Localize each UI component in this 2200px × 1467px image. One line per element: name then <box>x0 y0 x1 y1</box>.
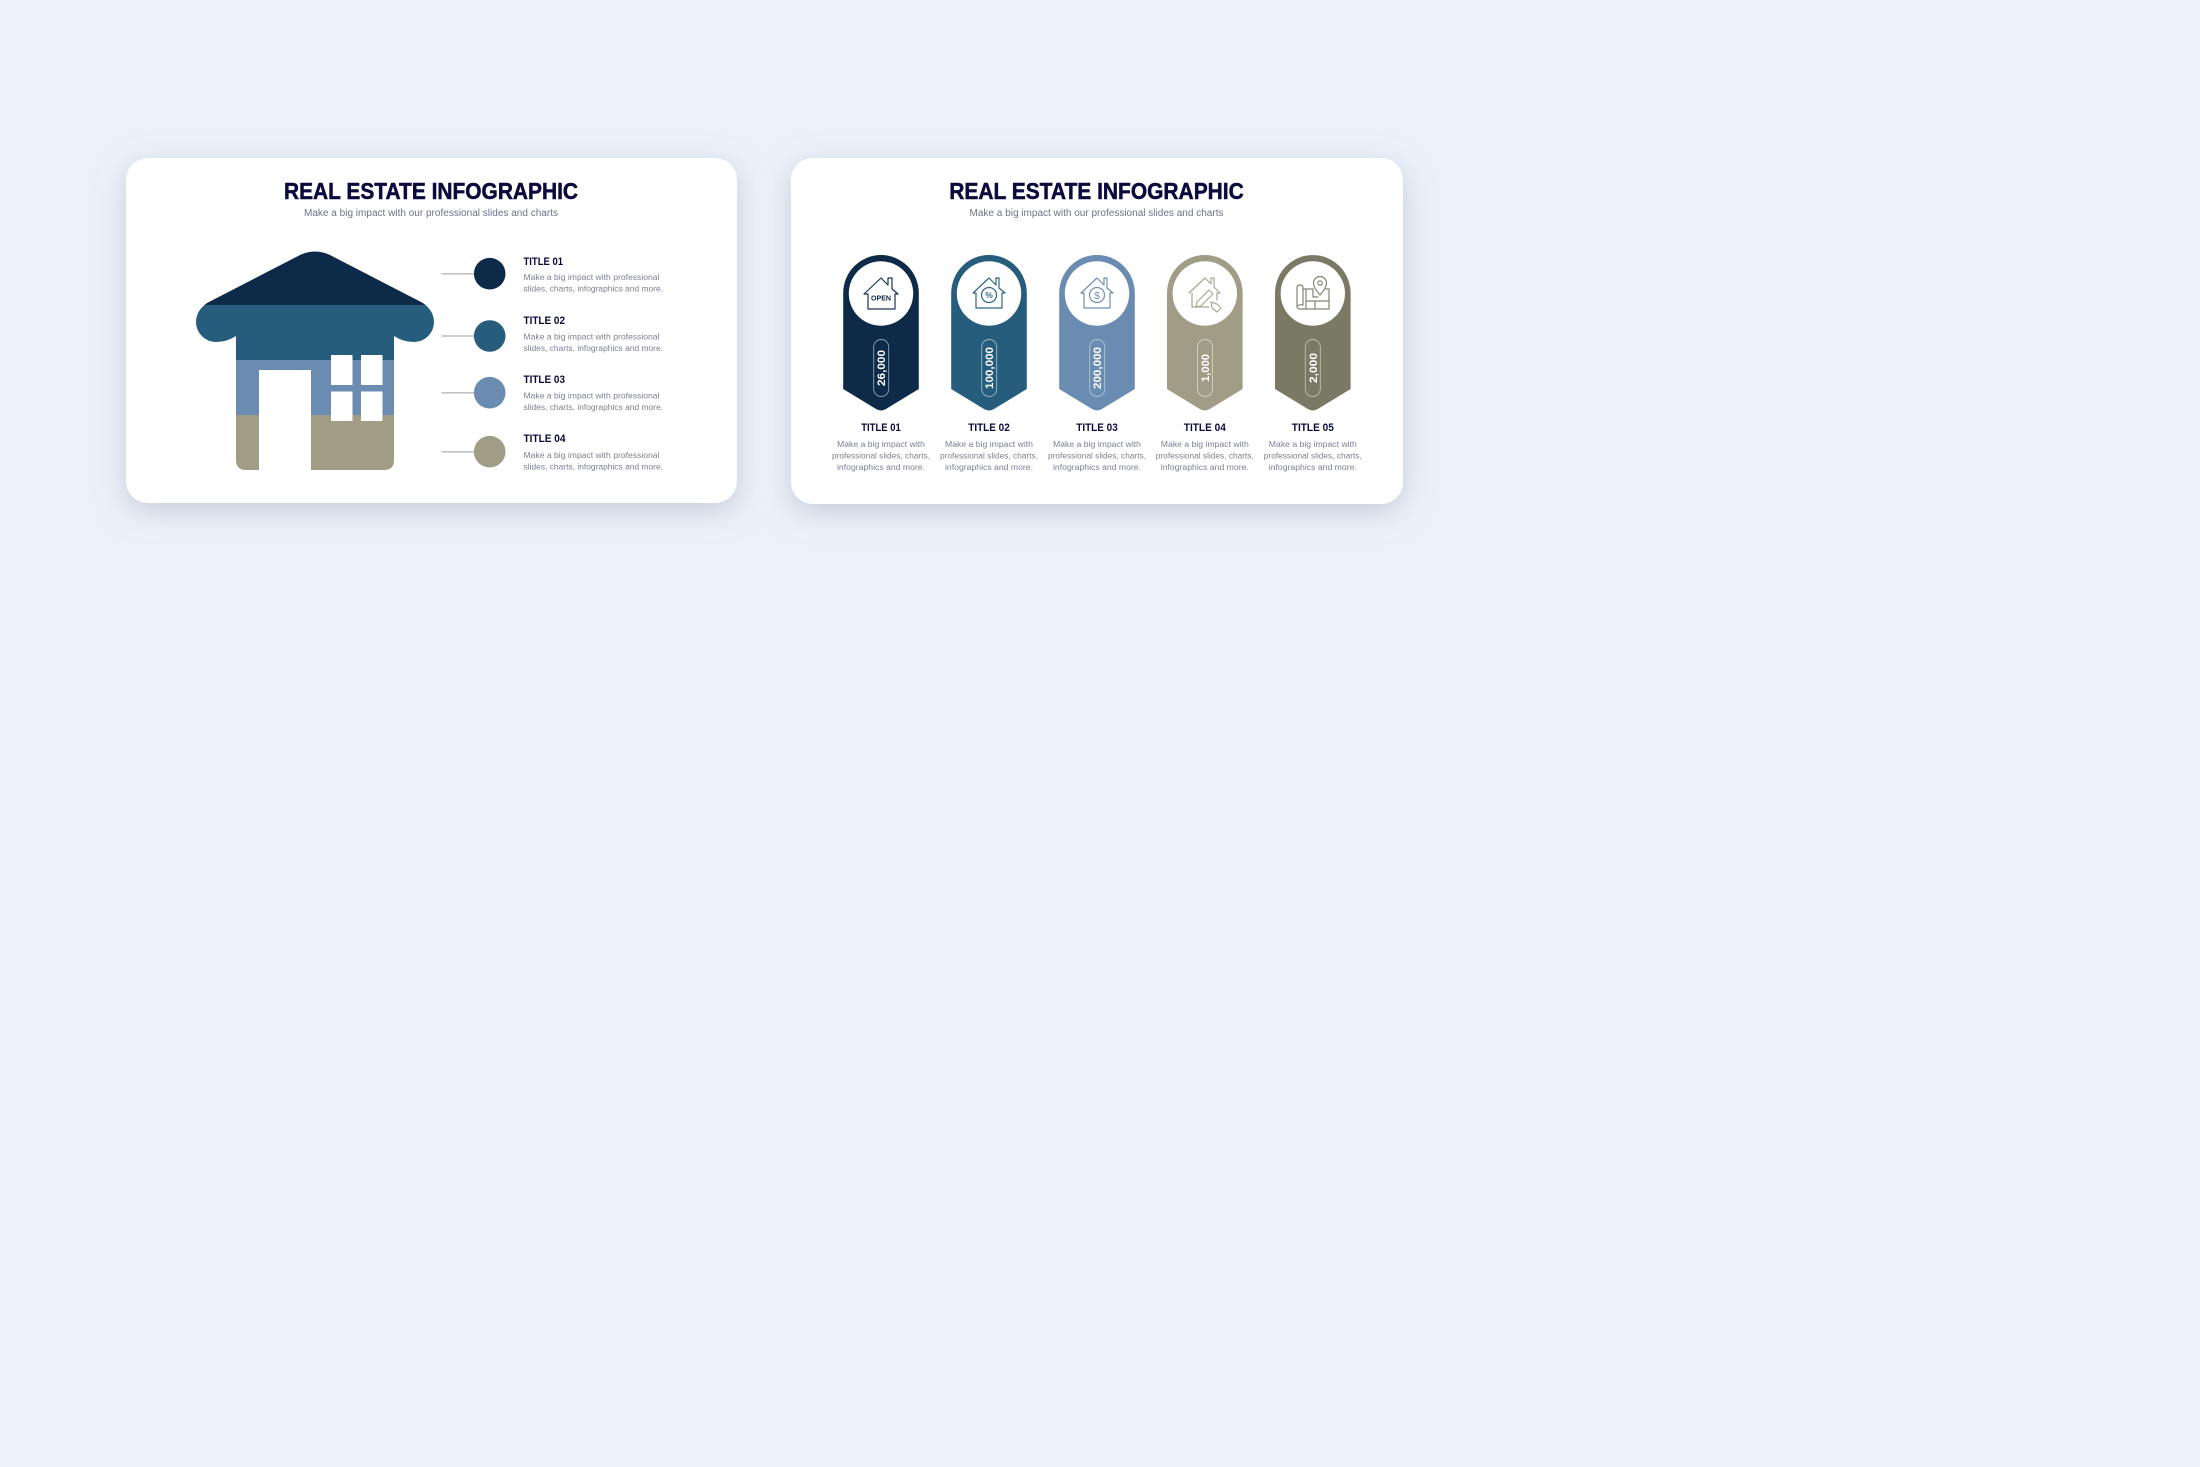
legend item 03: slides, charts, infographics and more. <box>524 403 663 412</box>
pin 01 <box>832 255 930 472</box>
legend item 04: slides, charts, infographics and more. <box>524 462 663 472</box>
pin 04 <box>1156 255 1254 472</box>
legend item 03 <box>442 374 663 412</box>
legend item 01: TITLE 01 <box>524 256 563 268</box>
legend item 01: slides, charts, infographics and more. <box>524 284 663 294</box>
heading: right panel title: REAL ESTATE INFOGRAPHIC <box>949 178 1244 204</box>
icon: house with pencil <box>1189 278 1221 312</box>
icon: dollar house <box>1081 278 1113 308</box>
value: 26,000: 26,000 <box>876 350 888 386</box>
pin 04: TITLE 04 <box>1184 422 1227 434</box>
pin 01: professional slides, charts, <box>832 452 930 460</box>
text: right panel subtitle: Make a big impact with our professional slides and charts <box>970 208 1224 219</box>
pin 05: infographics and more. <box>1269 463 1357 472</box>
pin 03: infographics and more. <box>1053 463 1141 472</box>
chart: layered house <box>190 245 440 475</box>
icon: percent house: % <box>985 290 993 300</box>
pin 03: Make a big impact with <box>1053 440 1141 449</box>
icon: percent house <box>973 278 1005 308</box>
pin 03 <box>1048 255 1146 472</box>
legend item 04: TITLE 04 <box>524 433 566 445</box>
value: 2,000: 2,000 <box>1308 353 1320 383</box>
legend item 01: Make a big impact with professional <box>524 273 660 282</box>
icon: map with location pin <box>1297 276 1329 309</box>
pin 02: Make a big impact with <box>945 440 1033 449</box>
pin 02: infographics and more. <box>945 463 1033 472</box>
value: 200,000: 200,000 <box>1092 347 1104 389</box>
icon: open house <box>864 278 898 309</box>
pin 03: TITLE 03 <box>1076 422 1118 434</box>
pin 05: professional slides, charts, <box>1264 452 1362 460</box>
legend item 04 <box>442 433 663 472</box>
legend item 02: Make a big impact with professional <box>524 332 660 342</box>
icon: dollar house: $ <box>1094 290 1100 302</box>
icon: open house: OPEN <box>871 296 891 302</box>
pin 04: Make a big impact with <box>1161 440 1249 449</box>
legend item 02: slides, charts, infographics and more. <box>524 344 663 353</box>
legend item 04: Make a big impact with professional <box>524 451 660 460</box>
pin 02: professional slides, charts, <box>940 452 1038 460</box>
pin 05 <box>1264 255 1362 472</box>
legend item 03: TITLE 03 <box>524 374 565 386</box>
legend item 03: Make a big impact with professional <box>524 392 660 400</box>
value: 1,000: 1,000 <box>1200 354 1212 382</box>
heading: left panel title: REAL ESTATE INFOGRAPHIC <box>284 178 578 204</box>
legend item 02: TITLE 02 <box>524 315 565 327</box>
pin 01: Make a big impact with <box>837 440 925 449</box>
panel: house infographic card <box>126 158 737 503</box>
pin 05: TITLE 05 <box>1292 422 1334 434</box>
text: left panel subtitle: Make a big impact with our professional slides and charts <box>304 208 558 219</box>
pin 03: professional slides, charts, <box>1048 452 1146 460</box>
legend item 01 <box>442 256 663 294</box>
pin 05: Make a big impact with <box>1269 440 1357 449</box>
legend item 02 <box>442 315 663 353</box>
pin 01: infographics and more. <box>837 463 925 472</box>
pin 04: professional slides, charts, <box>1156 452 1254 460</box>
pin 02: TITLE 02 <box>968 422 1010 434</box>
value: 100,000: 100,000 <box>984 347 996 389</box>
pin 02 <box>940 255 1038 472</box>
pin 01: TITLE 01 <box>861 422 901 434</box>
panel: pins infographic card <box>791 158 1403 504</box>
pin 04: infographics and more. <box>1161 463 1249 472</box>
